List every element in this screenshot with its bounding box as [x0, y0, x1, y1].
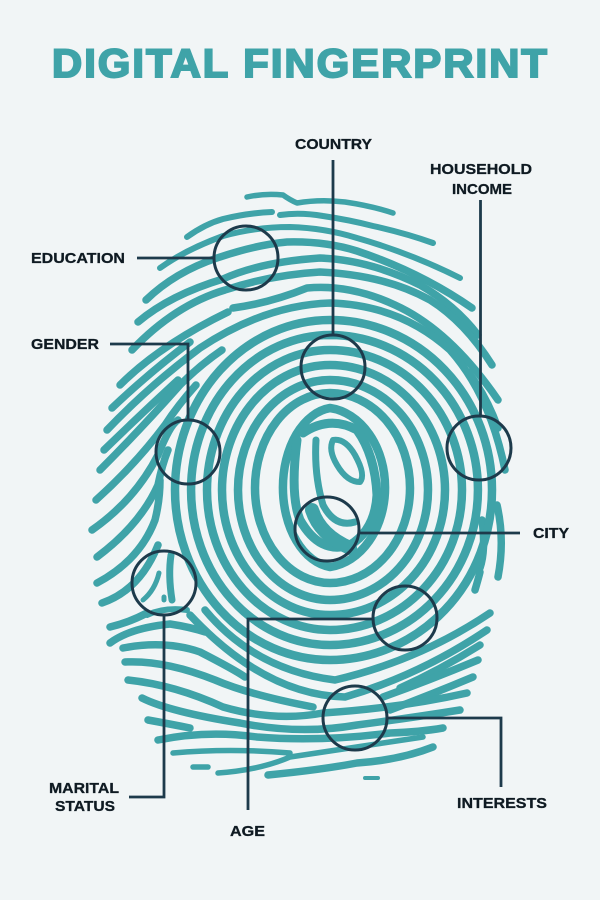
label: marital status [49, 780, 119, 815]
highlight circles [132, 226, 511, 750]
label: country: COUNTRY [295, 136, 372, 153]
label: interests: INTERESTS [457, 795, 547, 812]
label: household income: INCOME [452, 181, 512, 198]
label: household income [430, 161, 532, 198]
label: household income: HOUSEHOLD [430, 161, 532, 178]
title: DIGITAL FINGERPRINT [52, 42, 549, 86]
label: gender: GENDER [31, 336, 99, 353]
label: age: AGE [230, 823, 265, 840]
label: marital status: MARITAL [49, 780, 119, 797]
label: education: EDUCATION [31, 250, 125, 267]
label: marital status: STATUS [55, 798, 115, 815]
connector lines [110, 160, 520, 810]
label: city: CITY [533, 525, 569, 542]
fingerprint illustration [92, 194, 505, 778]
